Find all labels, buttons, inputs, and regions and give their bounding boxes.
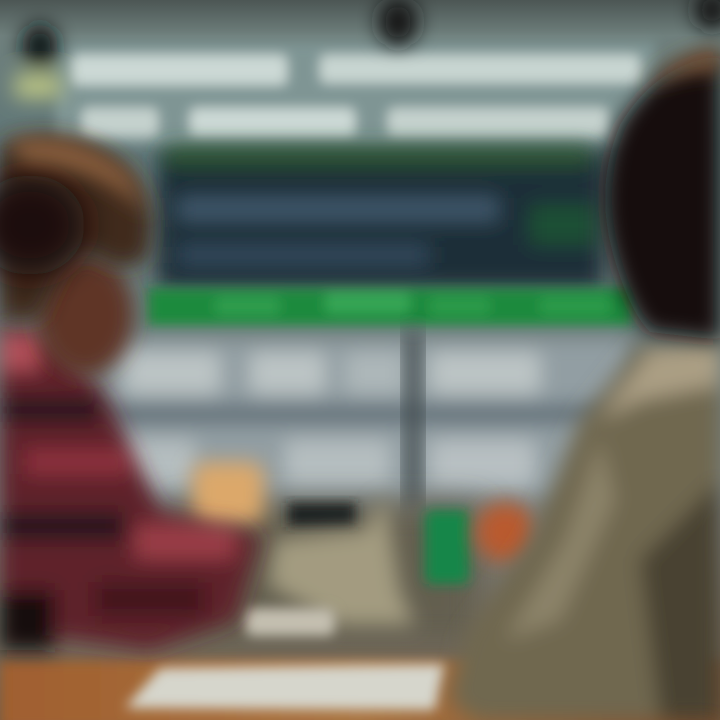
desk screen xyxy=(288,503,356,527)
hair highlight xyxy=(10,138,148,215)
orange fruit xyxy=(475,502,535,562)
board centre post xyxy=(405,330,421,510)
board: upper white text rows xyxy=(55,42,655,147)
desk objects xyxy=(170,462,535,645)
lower desk shadow xyxy=(170,505,480,645)
left person xyxy=(0,136,260,650)
glowing drink xyxy=(192,462,264,524)
dark head xyxy=(605,55,720,340)
beige sweater xyxy=(450,340,720,720)
ceiling cameras xyxy=(15,0,720,98)
right person xyxy=(450,48,720,720)
white paper xyxy=(125,664,445,710)
green bottle xyxy=(425,510,469,584)
face xyxy=(37,255,133,375)
board: green band xyxy=(148,288,632,326)
beige stand xyxy=(268,495,415,625)
board: light table rows xyxy=(105,338,630,498)
hair xyxy=(0,136,152,320)
table top xyxy=(0,608,720,720)
board: dark navy panel xyxy=(158,146,603,288)
plaid shirt xyxy=(0,325,260,650)
hair rim light xyxy=(645,48,720,88)
dark hair shading xyxy=(0,175,85,275)
